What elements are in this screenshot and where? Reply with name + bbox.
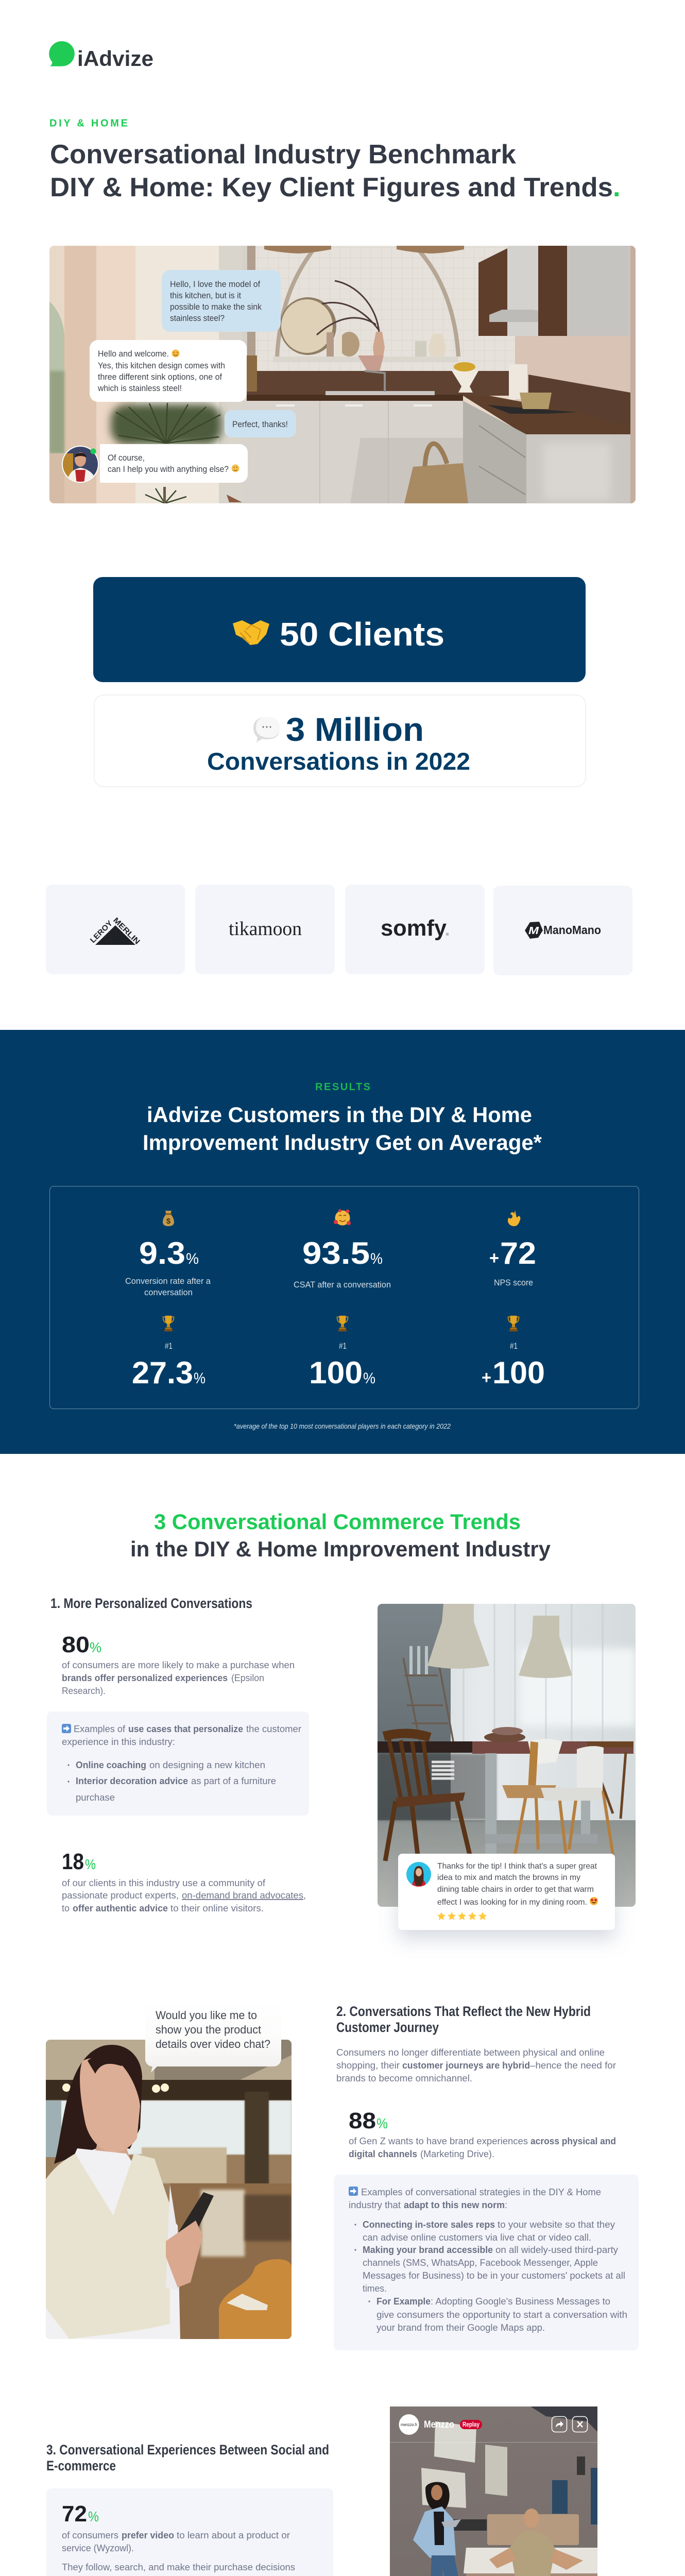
hero photo: kitchen with chat bubbles — [49, 246, 636, 503]
icon: money bag — [163, 1211, 174, 1226]
stat: 18%: 18 — [62, 1849, 84, 1874]
chat bubble: customer question: Hello, I love the model of — [170, 279, 260, 289]
chat bubble: closing: can I help you with anything else? — [108, 464, 229, 474]
speech bubble: video chat: Would you like me to — [156, 2009, 257, 2022]
eyebrow: DIY & HOME: DIY & HOME — [49, 117, 128, 129]
trend 2 intro: Consumers no longer differentiate between physical and online — [336, 2047, 605, 2058]
stat: best NPS: #1 — [510, 1341, 518, 1351]
photo: dining room — [378, 1604, 636, 1907]
stat: NPS: + — [489, 1248, 499, 1268]
stat: best CSAT: #1 — [339, 1341, 347, 1351]
stat: best CSAT: % — [363, 1370, 375, 1387]
review text: effect I was looking for in my dining room. — [437, 1898, 587, 1907]
stat: 72%: to learn about a product or — [177, 2530, 290, 2540]
stat: 72%: 72 — [62, 2501, 87, 2527]
panel: omnichannel strategies: Examples of conversational strategies in the DIY & Home — [361, 2187, 601, 2197]
panel: omnichannel strategies: Making your brand accessible — [363, 2245, 493, 2255]
review card — [398, 1854, 615, 1930]
stat: 18%: % — [85, 1856, 96, 1872]
eyebrow: results: RESULTS — [315, 1081, 370, 1093]
stat: 18%: to — [62, 1903, 70, 1913]
stat: NPS: 72 — [500, 1236, 536, 1270]
trend 3 heading: 3. Conversational Experiences Between Social and — [46, 2442, 329, 2458]
trend 2 intro — [336, 2047, 616, 2083]
title: DIY & Home: Key Client Figures and Trends — [50, 173, 613, 202]
photo: woman with phone — [46, 2040, 292, 2339]
reviewer avatar — [406, 1862, 431, 1888]
logo tile: Leroy Merlin: LEROY — [89, 919, 114, 945]
logo tile: ManoMano — [493, 886, 632, 975]
review text: idea to mix and match the browns in my — [437, 1873, 580, 1882]
results heading: iAdvize Customers in the DIY & Home — [147, 1103, 532, 1127]
woman — [54, 2045, 142, 2164]
review text: Thanks for the tip! I think that's a super great — [437, 1862, 597, 1871]
trend 3 heading: E-commerce — [46, 2458, 116, 2473]
panel: omnichannel strategies: give consumers the opportunity to start a conversation with — [376, 2310, 627, 2320]
stat: 80% — [62, 1632, 295, 1696]
brand header: Replay — [463, 2421, 480, 2428]
stat: 80%: 80 — [62, 1632, 90, 1657]
chat bubble: advisor answer: three different sink options, one of — [98, 372, 222, 382]
chat bubble: customer question: this kitchen, but is it — [170, 291, 241, 300]
stat: best NPS — [482, 1316, 545, 1390]
wall maps — [434, 2421, 476, 2463]
trend 2 heading: Customer Journey — [336, 2020, 439, 2035]
panel: omnichannel strategies — [334, 2175, 639, 2350]
panel: personalization use cases: use cases that personalize — [128, 1724, 243, 1734]
stat: 72%: % — [88, 2509, 99, 2524]
stat: conversion rate: conversation — [144, 1287, 193, 1297]
wooden chairs — [384, 1733, 470, 1861]
stat: best NPS: 100 — [492, 1355, 545, 1390]
stat: conversion rate — [125, 1211, 211, 1297]
stat: conversion rate: Conversion rate after a — [125, 1276, 211, 1286]
panel: omnichannel strategies: industry that — [349, 2200, 401, 2210]
panel: omnichannel strategies: to your website so that they — [498, 2219, 615, 2230]
icon: smiling face with hearts — [334, 1209, 351, 1225]
advisor avatar — [62, 446, 99, 484]
footnote: *average of the top 10 most conversational players in each category in 2022 — [234, 1422, 451, 1430]
chat bubble: closing — [100, 444, 248, 483]
icon: speech bubble — [253, 717, 280, 742]
stat: 18%: on-demand brand advocates — [182, 1890, 303, 1901]
panel: omnichannel strategies: Messages for Business) to be in your customers' pockets at all — [363, 2270, 625, 2281]
pendant lamps — [427, 1604, 489, 1669]
stat: CSAT: 93.5 — [302, 1236, 370, 1270]
title: Conversational Industry Benchmark — [50, 140, 516, 170]
review text — [437, 1862, 597, 1907]
stat: 72%: of consumers — [62, 2530, 118, 2540]
panel: omnichannel strategies: : Adopting Google's Business Messages to — [431, 2296, 610, 2307]
share button — [552, 2416, 567, 2432]
stat: 72%: They follow, search, and make their purchase decisions — [62, 2562, 295, 2572]
panel: omnichannel strategies: your brand from their Google Maps app. — [376, 2323, 545, 2333]
logo tile: Leroy Merlin — [46, 885, 185, 974]
stat: 18%: , — [303, 1890, 306, 1901]
results heading: Improvement Industry Get on Average* — [143, 1130, 542, 1155]
panel: personalization use cases: Examples of — [74, 1724, 126, 1734]
panel: personalization use cases: experience in this industry: — [62, 1737, 175, 1747]
results panel — [49, 1186, 639, 1409]
icon: handshake — [233, 620, 269, 645]
client logos — [46, 885, 632, 975]
trend 2 intro: brands to become omnichannel. — [336, 2073, 472, 2083]
stat: CSAT: CSAT after a conversation — [294, 1280, 391, 1290]
stat: 18%: of our clients in this industry use a community of — [62, 1878, 266, 1888]
stat: 80%: % — [90, 1639, 101, 1655]
stat: 88% — [349, 2108, 616, 2159]
trend 3 heading — [46, 2442, 329, 2473]
chat bubble: customer question: stainless steel? — [170, 313, 225, 323]
kitchen illustration — [49, 246, 636, 503]
stat: NPS: NPS score — [494, 1278, 533, 1287]
icon: trophy — [508, 1316, 519, 1331]
stat: 88%: 88 — [349, 2108, 376, 2133]
card: 3 million conversations — [94, 695, 586, 787]
logo tile: ManoMano: ManoMano — [543, 923, 601, 937]
panel: personalization use cases — [47, 1711, 309, 1816]
logo tile: somfy — [345, 885, 485, 974]
chat bubble: customer question: possible to make the sink — [170, 302, 262, 312]
logo tile: ManoMano: M — [528, 925, 540, 937]
brand header — [399, 2414, 482, 2435]
stat: 80%: of consumers are more likely to make a purchase when — [62, 1660, 295, 1670]
trends heading: 3 Conversational Commerce Trends — [154, 1510, 521, 1534]
stat: 80%: (Epsilon — [231, 1673, 264, 1683]
trends heading: in the DIY & Home Improvement Industry — [130, 1537, 551, 1561]
panel: personalization use cases: Online coaching — [76, 1760, 146, 1770]
chat bubble: customer question — [162, 270, 281, 332]
stat: 88%: across physical and — [530, 2136, 616, 2146]
stat text: 50 Clients — [280, 616, 444, 653]
icon: arrow — [62, 1724, 71, 1733]
panel: omnichannel strategies: Connecting in-store sales reps — [363, 2219, 495, 2230]
chat bubble: thanks — [225, 410, 296, 437]
close button — [573, 2416, 587, 2432]
logo: iAdvize — [49, 41, 153, 71]
panel: video stats — [46, 2488, 333, 2576]
icon: trophy — [337, 1316, 348, 1331]
icon: heart eyes — [590, 1897, 598, 1905]
stat: best CSAT — [309, 1316, 375, 1390]
stat: 72%: service (Wyzowl). — [62, 2543, 134, 2553]
panel: omnichannel strategies: times. — [363, 2283, 387, 2294]
panel: omnichannel strategies: channels (SMS, WhatsApp, Facebook Messenger, Apple — [363, 2258, 598, 2268]
phone screenshot: live shopping — [390, 2406, 597, 2576]
headboard and bed — [487, 2514, 579, 2545]
plates — [432, 1762, 454, 1778]
speech bubble: video chat: details over video chat? — [156, 2038, 270, 2050]
panel: personalization use cases: Interior decoration advice — [76, 1776, 188, 1786]
logo tile: somfy: somfy — [381, 916, 447, 941]
brand header: Menzzo — [424, 2419, 454, 2430]
live video scene — [390, 2406, 597, 2576]
trend 2 intro: shopping, their — [336, 2060, 400, 2071]
trends heading — [130, 1510, 551, 1561]
stat: CSAT — [294, 1209, 391, 1290]
results heading — [143, 1103, 542, 1155]
stat: best NPS: + — [482, 1368, 491, 1387]
stat text: 3 Million — [286, 711, 424, 748]
stat: 88%: (Marketing Drive). — [420, 2149, 494, 2159]
chat bubble: advisor answer: which is stainless steel! — [97, 383, 182, 393]
table — [378, 1741, 472, 1753]
trend 2 intro: customer journeys are hybrid — [402, 2060, 530, 2071]
stat: 72%: prefer video — [122, 2530, 174, 2540]
stat: 80%: Research). — [62, 1686, 106, 1696]
chat bubble: advisor answer: Yes, this kitchen design comes with — [98, 361, 225, 370]
logo tile: somfy: ® — [446, 933, 449, 937]
panel: omnichannel strategies: For Example — [376, 2296, 431, 2307]
trend 2 heading: 2. Conversations That Reflect the New Hybrid — [336, 2004, 591, 2019]
stat: best conversion: 27.3 — [132, 1355, 193, 1390]
trend 2 intro: –hence the need for — [530, 2060, 616, 2071]
stat: 88%: % — [376, 2115, 388, 2131]
icon: trophy — [163, 1316, 174, 1331]
stat: 88%: of Gen Z wants to have brand experiences — [349, 2136, 528, 2146]
card: 50 clients — [93, 577, 586, 682]
five stars — [437, 1912, 487, 1920]
shelf ladder — [403, 1658, 453, 1741]
stat: best conversion: % — [194, 1370, 206, 1387]
stat: 18%: passionate product experts, — [62, 1890, 179, 1901]
logo tile: tikamoon: tikamoon — [229, 918, 302, 940]
stat: 18% — [62, 1849, 306, 1913]
speech bubble: video chat — [145, 2002, 281, 2073]
panel: omnichannel strategies: adapt to this new norm — [404, 2200, 505, 2210]
icon: arrow — [349, 2187, 358, 2196]
stat: best conversion: #1 — [165, 1341, 173, 1351]
wordmark: iAdvize — [77, 46, 153, 71]
panel: omnichannel strategies: can advise online customers via live chat or video call. — [363, 2232, 591, 2243]
icon: ok hand — [508, 1210, 520, 1226]
chat bubble: advisor answer — [90, 340, 247, 402]
panel: personalization use cases: on designing a new kitchen — [149, 1760, 265, 1770]
icon: money bag: $ — [166, 1217, 171, 1226]
logo tile: Leroy Merlin: MERLIN — [111, 916, 142, 946]
man — [524, 2509, 539, 2528]
stat: CSAT: % — [370, 1250, 383, 1267]
trend 2 heading — [336, 2004, 591, 2035]
stat caption: Conversations in 2022 — [207, 748, 470, 775]
panel: omnichannel strategies: on all widely-used third-party — [495, 2245, 618, 2255]
panel: personalization use cases: purchase — [76, 1792, 115, 1803]
brand header: menzzo.fr — [401, 2422, 417, 2427]
stat: 18%: offer authentic advice — [73, 1903, 168, 1913]
chat bubble: advisor answer: Hello and welcome. — [98, 349, 169, 359]
stat: 80%: brands offer personalized experiences — [62, 1673, 228, 1683]
stat: best conversion — [132, 1316, 206, 1390]
panel: omnichannel strategies: : — [505, 2200, 507, 2210]
logo tile: tikamoon — [195, 885, 335, 974]
speech bubble: video chat: show you the product — [156, 2023, 261, 2036]
stat: conversion rate: 9.3 — [139, 1236, 185, 1270]
review text: dining table chairs in order to get that warm — [437, 1885, 594, 1894]
results section — [0, 1030, 685, 1454]
trend 1 heading: 1. More Personalized Conversations — [50, 1596, 252, 1611]
chat bubble: closing: Of course, — [108, 453, 145, 463]
woman — [425, 2482, 450, 2512]
panel: personalization use cases: as part of a furniture — [191, 1776, 276, 1786]
title — [50, 140, 620, 202]
chat bubble: thanks: Perfect, thanks! — [232, 419, 288, 429]
stat: 72% — [62, 2501, 295, 2576]
title: . — [613, 173, 620, 202]
stat: conversion rate: % — [186, 1250, 199, 1267]
panel: personalization use cases: the customer — [246, 1724, 301, 1734]
stat: 88%: digital channels — [349, 2149, 417, 2159]
stat: NPS — [489, 1210, 536, 1287]
icon: green speech bubble — [49, 41, 75, 66]
stat: best CSAT: 100 — [309, 1355, 363, 1390]
stat: 18%: to their online visitors. — [170, 1903, 264, 1913]
